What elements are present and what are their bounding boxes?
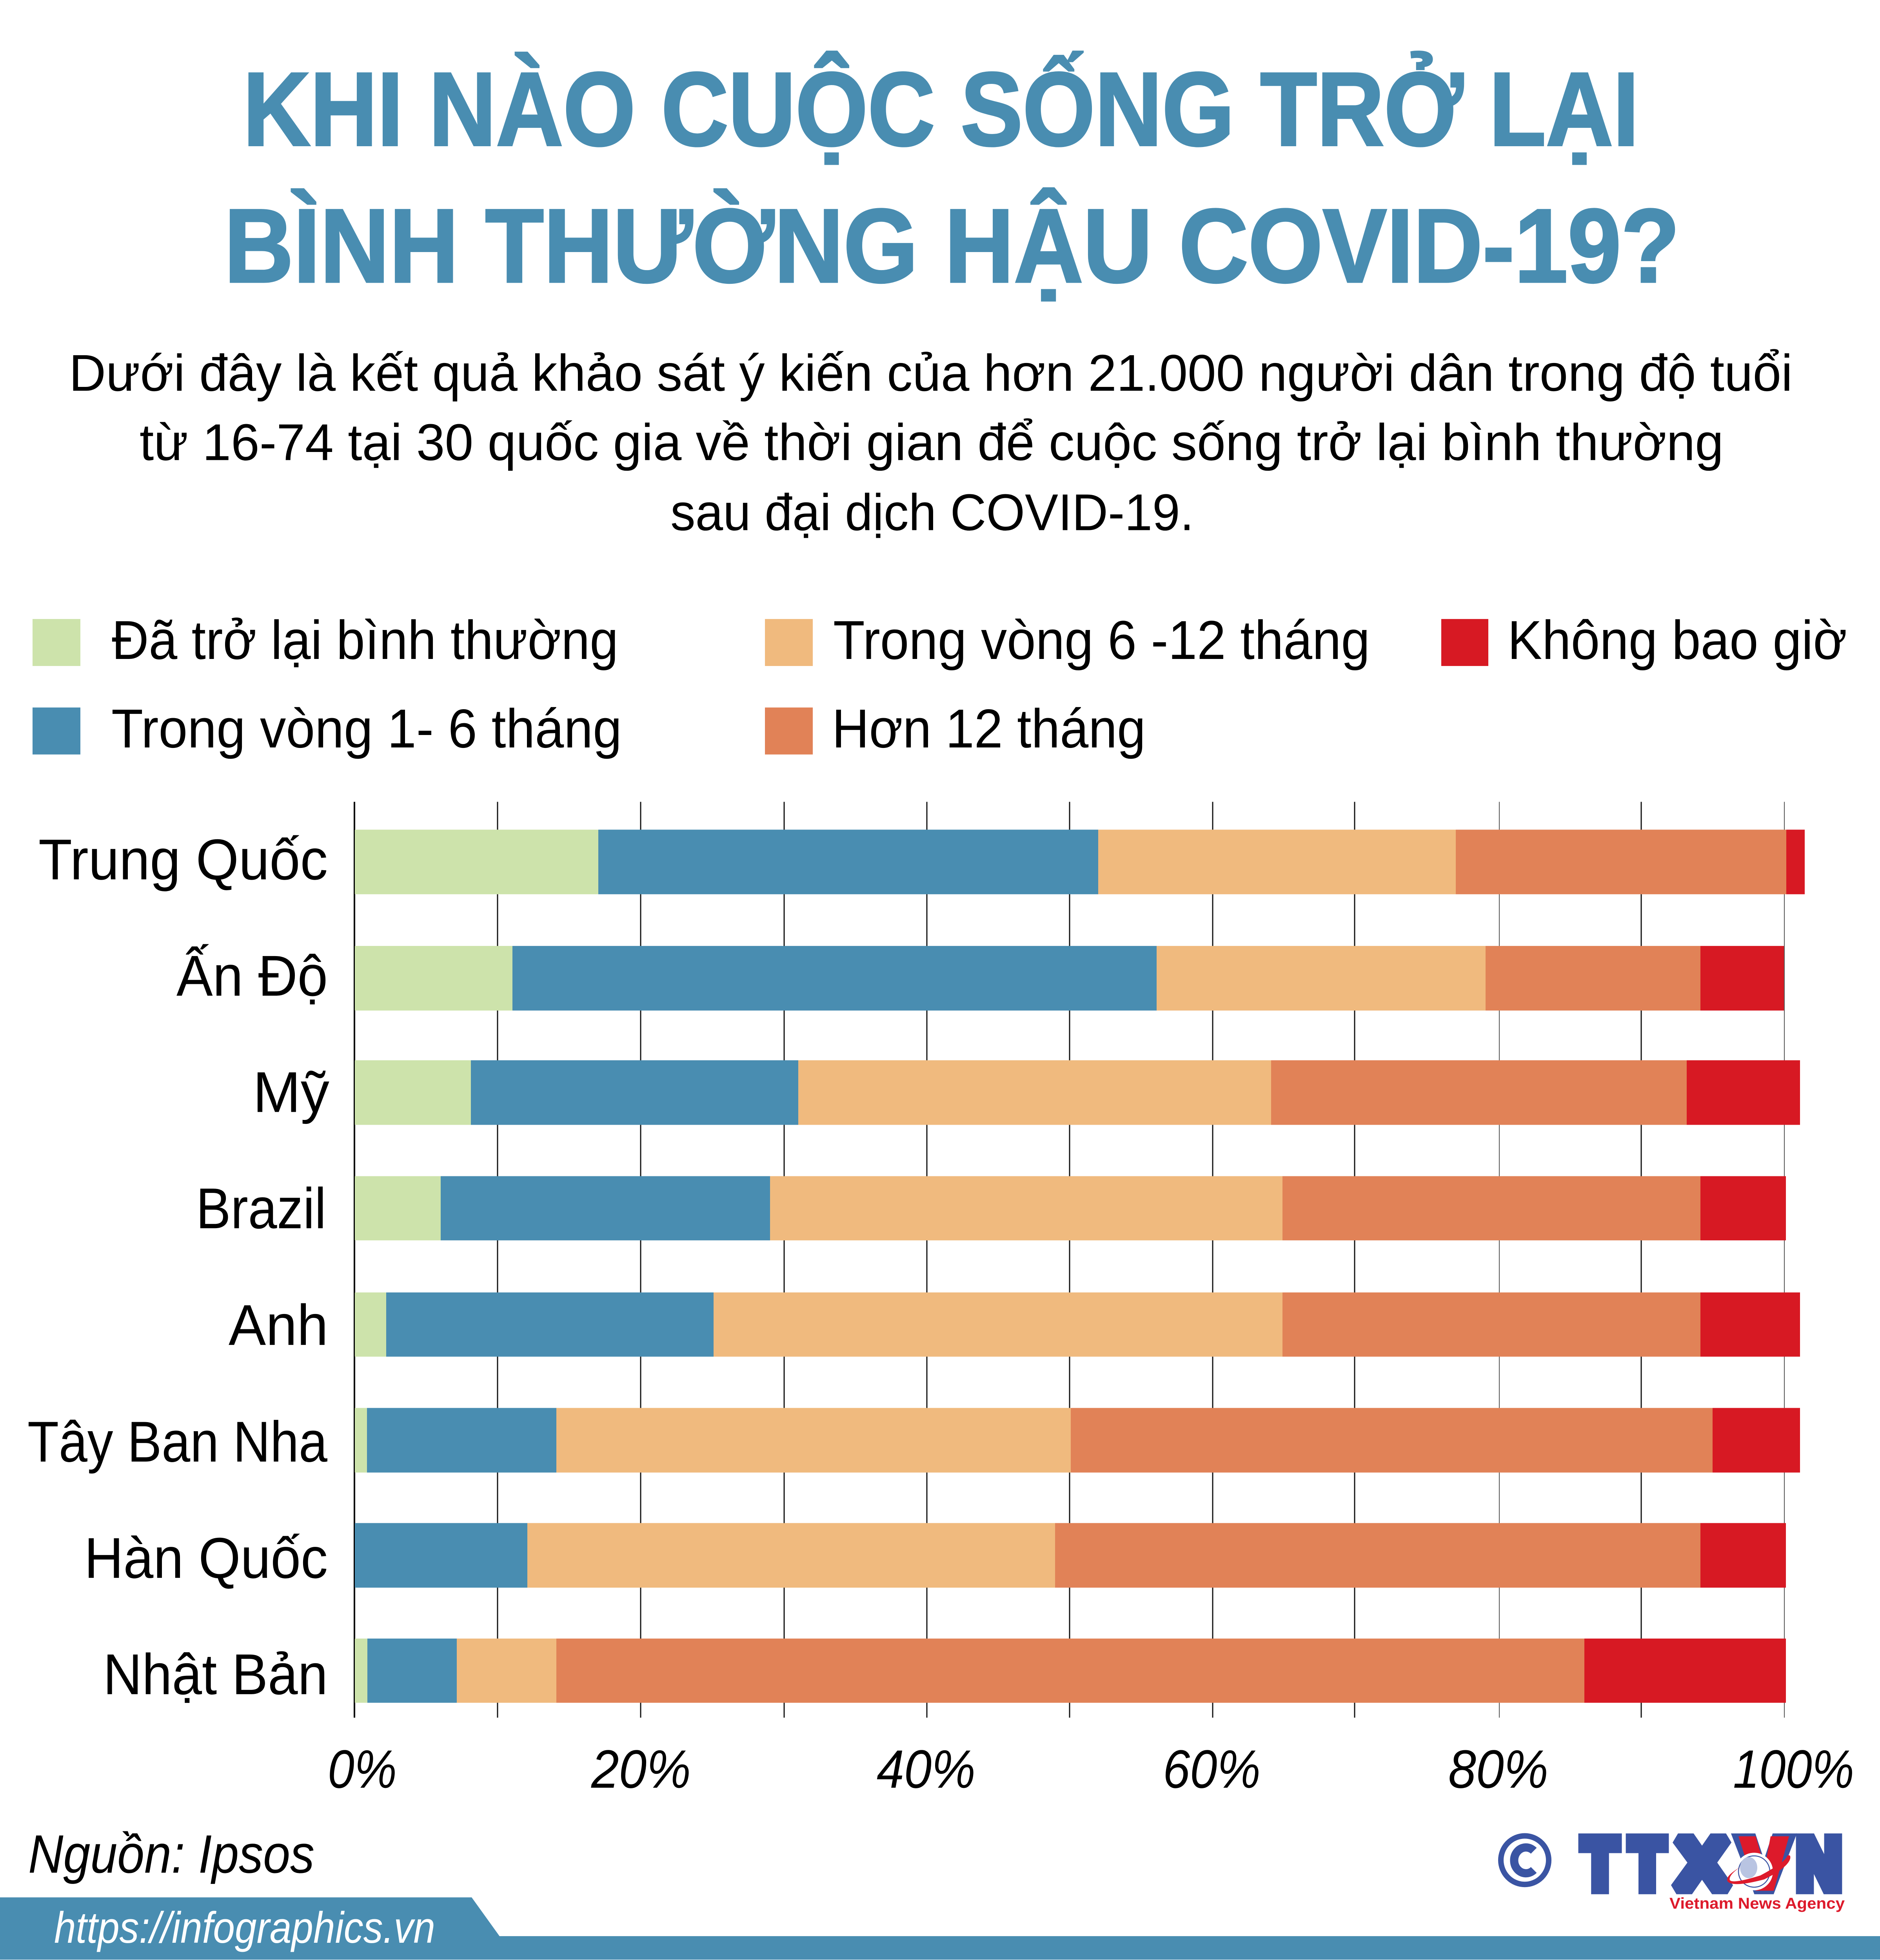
country labels: Mỹ — [253, 1060, 330, 1125]
logo letters: V — [1739, 1824, 1789, 1904]
legend item: within 1-6 months: Trong vòng 1- 6 tháng — [111, 698, 622, 759]
intro text: Dưới đây là kết quả khảo sát ý kiến của hơn 21.000 người dân trong độ tuổi — [69, 344, 1793, 402]
logo letters — [1582, 1824, 1841, 1904]
title: KHI NÀO CUỘC SỐNG TRỞ LẠI — [243, 51, 1639, 168]
legend — [33, 609, 1847, 759]
legend item: more than 12 months: Hơn 12 tháng — [832, 698, 1146, 759]
logo: TTXVN — [1501, 1824, 1845, 1912]
logo red V — [1738, 1836, 1789, 1891]
bar: Anh — [355, 1292, 1800, 1357]
title: BÌNH THƯỜNG HẬU COVID-19? — [224, 187, 1680, 304]
logo letters: T — [1582, 1824, 1618, 1904]
bar: Trung Quốc — [355, 829, 1805, 894]
axis labels: 40% — [877, 1739, 975, 1800]
stacked bar chart — [27, 802, 1854, 1800]
icon: copyright — [1501, 1836, 1549, 1884]
title — [224, 51, 1680, 304]
country labels: Trung Quốc — [38, 828, 328, 892]
country labels: Anh — [229, 1293, 328, 1357]
intro text — [69, 344, 1793, 541]
country labels: Hàn Quốc — [84, 1526, 328, 1590]
axis labels: 20% — [591, 1739, 691, 1800]
axis labels: 100% — [1733, 1739, 1854, 1800]
country labels: Ấn Độ — [176, 944, 328, 1008]
bar: Hàn Quốc — [355, 1523, 1786, 1588]
intro text: sau đại dịch COVID-19. — [670, 483, 1194, 541]
legend item: never: Không bao giờ — [1508, 609, 1847, 671]
logo globe — [1727, 1853, 1790, 1890]
country labels: Tây Ban Nha — [27, 1410, 327, 1474]
bar: Brazil — [355, 1176, 1786, 1240]
axis labels: 60% — [1163, 1739, 1261, 1800]
country labels: Nhật Bản — [103, 1642, 328, 1707]
source note: Nguồn: Ipsos — [28, 1824, 314, 1884]
legend item: already normal: Đã trở lại bình thường — [112, 609, 618, 671]
grid lines — [354, 802, 1784, 1718]
axis labels — [328, 1739, 1854, 1800]
country labels — [27, 828, 330, 1707]
axis labels: 80% — [1448, 1739, 1548, 1800]
logo letters: X — [1676, 1824, 1728, 1904]
bar: Nhật Bản — [355, 1639, 1786, 1703]
bar: Mỹ — [355, 1060, 1800, 1125]
country labels: Brazil — [196, 1176, 326, 1241]
bar: Tây Ban Nha — [355, 1408, 1800, 1472]
intro text: từ 16-74 tại 30 quốc gia về thời gian để cuộc sống trở lại bình thường — [140, 414, 1724, 471]
footer banner — [0, 1897, 1880, 1960]
bar: Ấn Độ — [355, 946, 1784, 1011]
logo caption: Vietnam News Agency — [1669, 1895, 1845, 1912]
logo letters: T — [1630, 1824, 1665, 1904]
legend item: within 6-12 months: Trong vòng 6 -12 tháng — [833, 609, 1370, 671]
axis labels: 0% — [328, 1739, 397, 1800]
website url: https://infographics.vn — [54, 1903, 435, 1952]
logo letters: N — [1797, 1824, 1841, 1904]
